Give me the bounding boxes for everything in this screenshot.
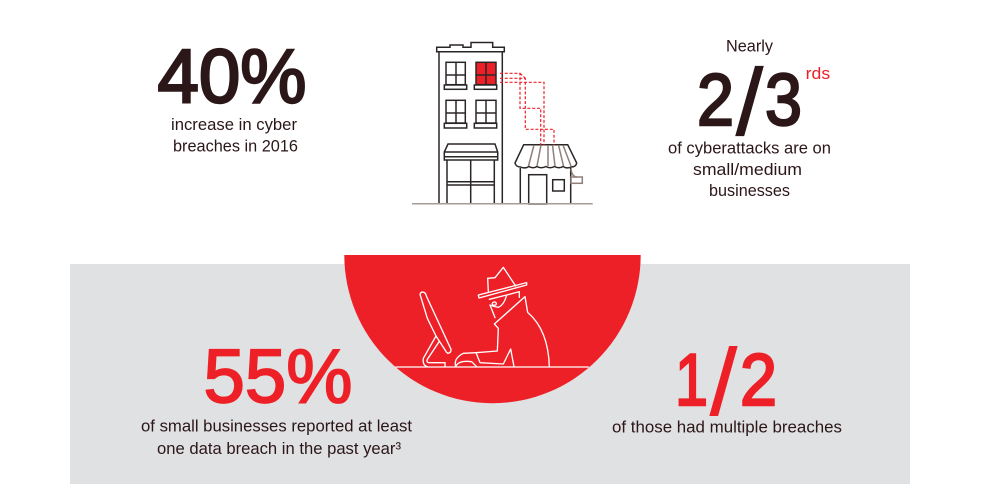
big number: 1/2: 2 xyxy=(740,340,777,421)
big number: 1/2: / xyxy=(710,330,738,434)
big number: 1/2: 1 xyxy=(675,340,708,421)
big number: 55%: 55% xyxy=(204,335,352,420)
hacker coat and arm xyxy=(476,297,549,367)
caption: reported a data breach: of small businesses reported at least xyxy=(141,418,412,436)
desk line xyxy=(396,365,588,369)
hacker hand and mouse xyxy=(455,353,477,367)
red half circle xyxy=(344,255,641,403)
caption: reported a data breach xyxy=(141,418,412,458)
icon: hacker at computer xyxy=(396,267,588,367)
caption: of cyberattacks are on small/medium businesses: small/medium xyxy=(693,161,802,179)
caption: reported a data breach: one data breach in the past year³ xyxy=(157,440,401,458)
computer monitor and stand xyxy=(420,292,451,353)
building outline and roof xyxy=(437,42,504,204)
caption: of those had multiple breaches: of those had multiple breaches xyxy=(612,419,842,437)
big number: 2/3: / xyxy=(736,50,764,154)
superscript: rds: rds xyxy=(806,65,830,83)
big number: 2/3: 2 xyxy=(697,60,734,141)
monitor stand xyxy=(423,336,445,367)
big number: 2/3: 3 xyxy=(765,60,802,141)
stat: half had multiple breaches xyxy=(612,330,842,437)
caption: of cyberattacks are on small/medium businesses: businesses xyxy=(709,182,790,200)
caption: of cyberattacks are on small/medium businesses: of cyberattacks are on xyxy=(668,139,831,157)
caption: increase in cyber breaches: breaches in 2016 xyxy=(173,138,298,156)
stat: 40 percent increase xyxy=(158,35,306,156)
caption: of cyberattacks are on small/medium businesses xyxy=(668,139,831,200)
stat: nearly two thirds xyxy=(668,38,831,200)
big number: 40%: 40% xyxy=(158,35,306,120)
building windows xyxy=(444,62,497,128)
hacker hat xyxy=(478,267,527,298)
hacker mask and face xyxy=(489,292,519,318)
compromised red window xyxy=(474,62,497,89)
stat: 55 percent of small businesses xyxy=(141,335,412,458)
caption: increase in cyber breaches: increase in cyber xyxy=(171,116,298,134)
ground line xyxy=(412,203,593,205)
icon: office building and shop with dashed attack lines xyxy=(412,42,593,204)
panel: grey background band xyxy=(70,264,910,484)
lead-in: Nearly: Nearly xyxy=(726,38,774,56)
building awning and storefront xyxy=(444,144,498,204)
small shop xyxy=(515,145,582,204)
red dashed attack lines xyxy=(500,73,554,145)
caption: increase in cyber breaches xyxy=(171,116,298,156)
